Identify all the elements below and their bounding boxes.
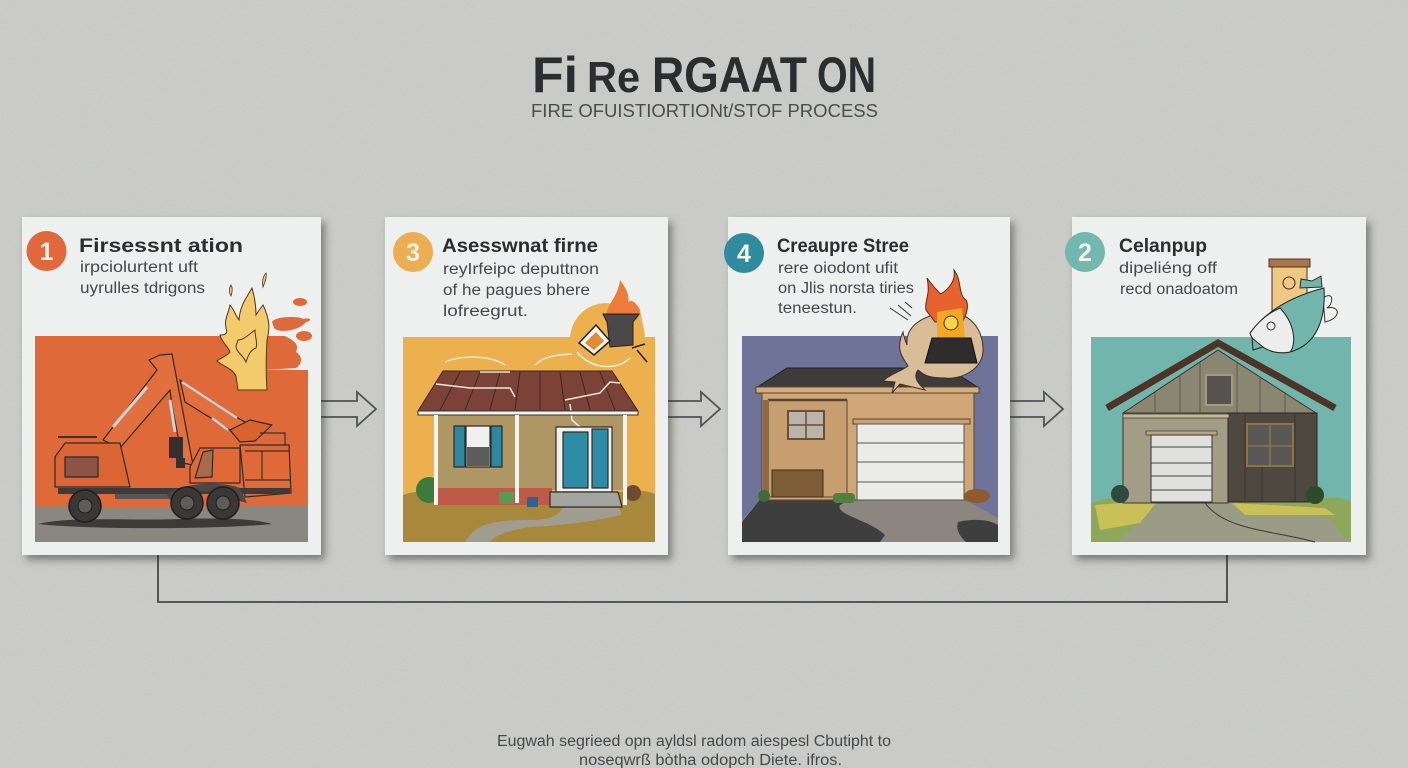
description: irpciolurtent uft bbox=[80, 259, 199, 276]
heading: Celanpup bbox=[1119, 236, 1207, 257]
badge 3: 3 bbox=[406, 239, 420, 267]
description: of he pagues bhere bbox=[443, 282, 590, 299]
description: recd onadoatom bbox=[1120, 281, 1238, 298]
title: Re bbox=[587, 53, 640, 102]
icon: flame on burner bbox=[883, 270, 983, 393]
description: teneestun. bbox=[778, 300, 857, 317]
heading: Asesswnat firne bbox=[442, 236, 598, 257]
description: lofreegrut. bbox=[443, 303, 528, 320]
heading: Firsessnt ation bbox=[79, 236, 243, 257]
title: ON bbox=[817, 47, 876, 103]
description bbox=[80, 259, 205, 297]
description: dipeliéng off bbox=[1119, 260, 1218, 277]
badge 2: 2 bbox=[1078, 239, 1092, 267]
badge 1: 1 bbox=[40, 238, 54, 266]
description bbox=[778, 260, 914, 317]
description: on Jlis norsta tiries bbox=[778, 280, 914, 297]
description: uyrulles tdrigons bbox=[80, 280, 205, 297]
description: rere oiodont ufit bbox=[778, 260, 899, 277]
panel: step 2 bbox=[385, 217, 668, 555]
footer note bbox=[497, 733, 891, 768]
illustration: house bbox=[403, 337, 655, 542]
arrow: step 3 to step 4 bbox=[1010, 392, 1063, 426]
description bbox=[443, 261, 599, 320]
icon: flame bbox=[217, 273, 269, 390]
connector line between first and last panel bbox=[158, 552, 1227, 602]
panel: step 4 bbox=[1065, 217, 1366, 555]
panel: step 1 bbox=[22, 217, 321, 555]
panel: step 3 bbox=[724, 217, 1010, 555]
badge 4 bbox=[724, 233, 764, 273]
illustration: barn garage bbox=[1091, 337, 1351, 542]
title bbox=[532, 47, 876, 103]
description: reyIrfeipc deputtnon bbox=[443, 261, 599, 278]
icon: chimney and fish bbox=[1250, 259, 1337, 353]
footer note: Eugwah segrieed opn ayldsl radom aiespesl Cbutipht to bbox=[497, 733, 891, 750]
illustration: excavator truck bbox=[35, 298, 312, 542]
title: RGAAT bbox=[652, 47, 807, 103]
heading: Creaupre Stree bbox=[777, 236, 909, 257]
badge 3 bbox=[393, 232, 433, 272]
illustration: house with garage bbox=[742, 336, 998, 542]
badge 2 bbox=[1065, 232, 1105, 272]
badge 4: 4 bbox=[737, 240, 751, 268]
arrow: step 1 to step 2 bbox=[321, 392, 376, 426]
title: Fi bbox=[532, 47, 578, 103]
arrow: step 2 to step 3 bbox=[668, 392, 720, 426]
subtitle: FIRE OFUISTIORTIONt/STOF PROCESS bbox=[531, 101, 878, 121]
description bbox=[1119, 260, 1238, 298]
badge 1 bbox=[26, 231, 66, 271]
icon: burning object bbox=[570, 280, 647, 368]
